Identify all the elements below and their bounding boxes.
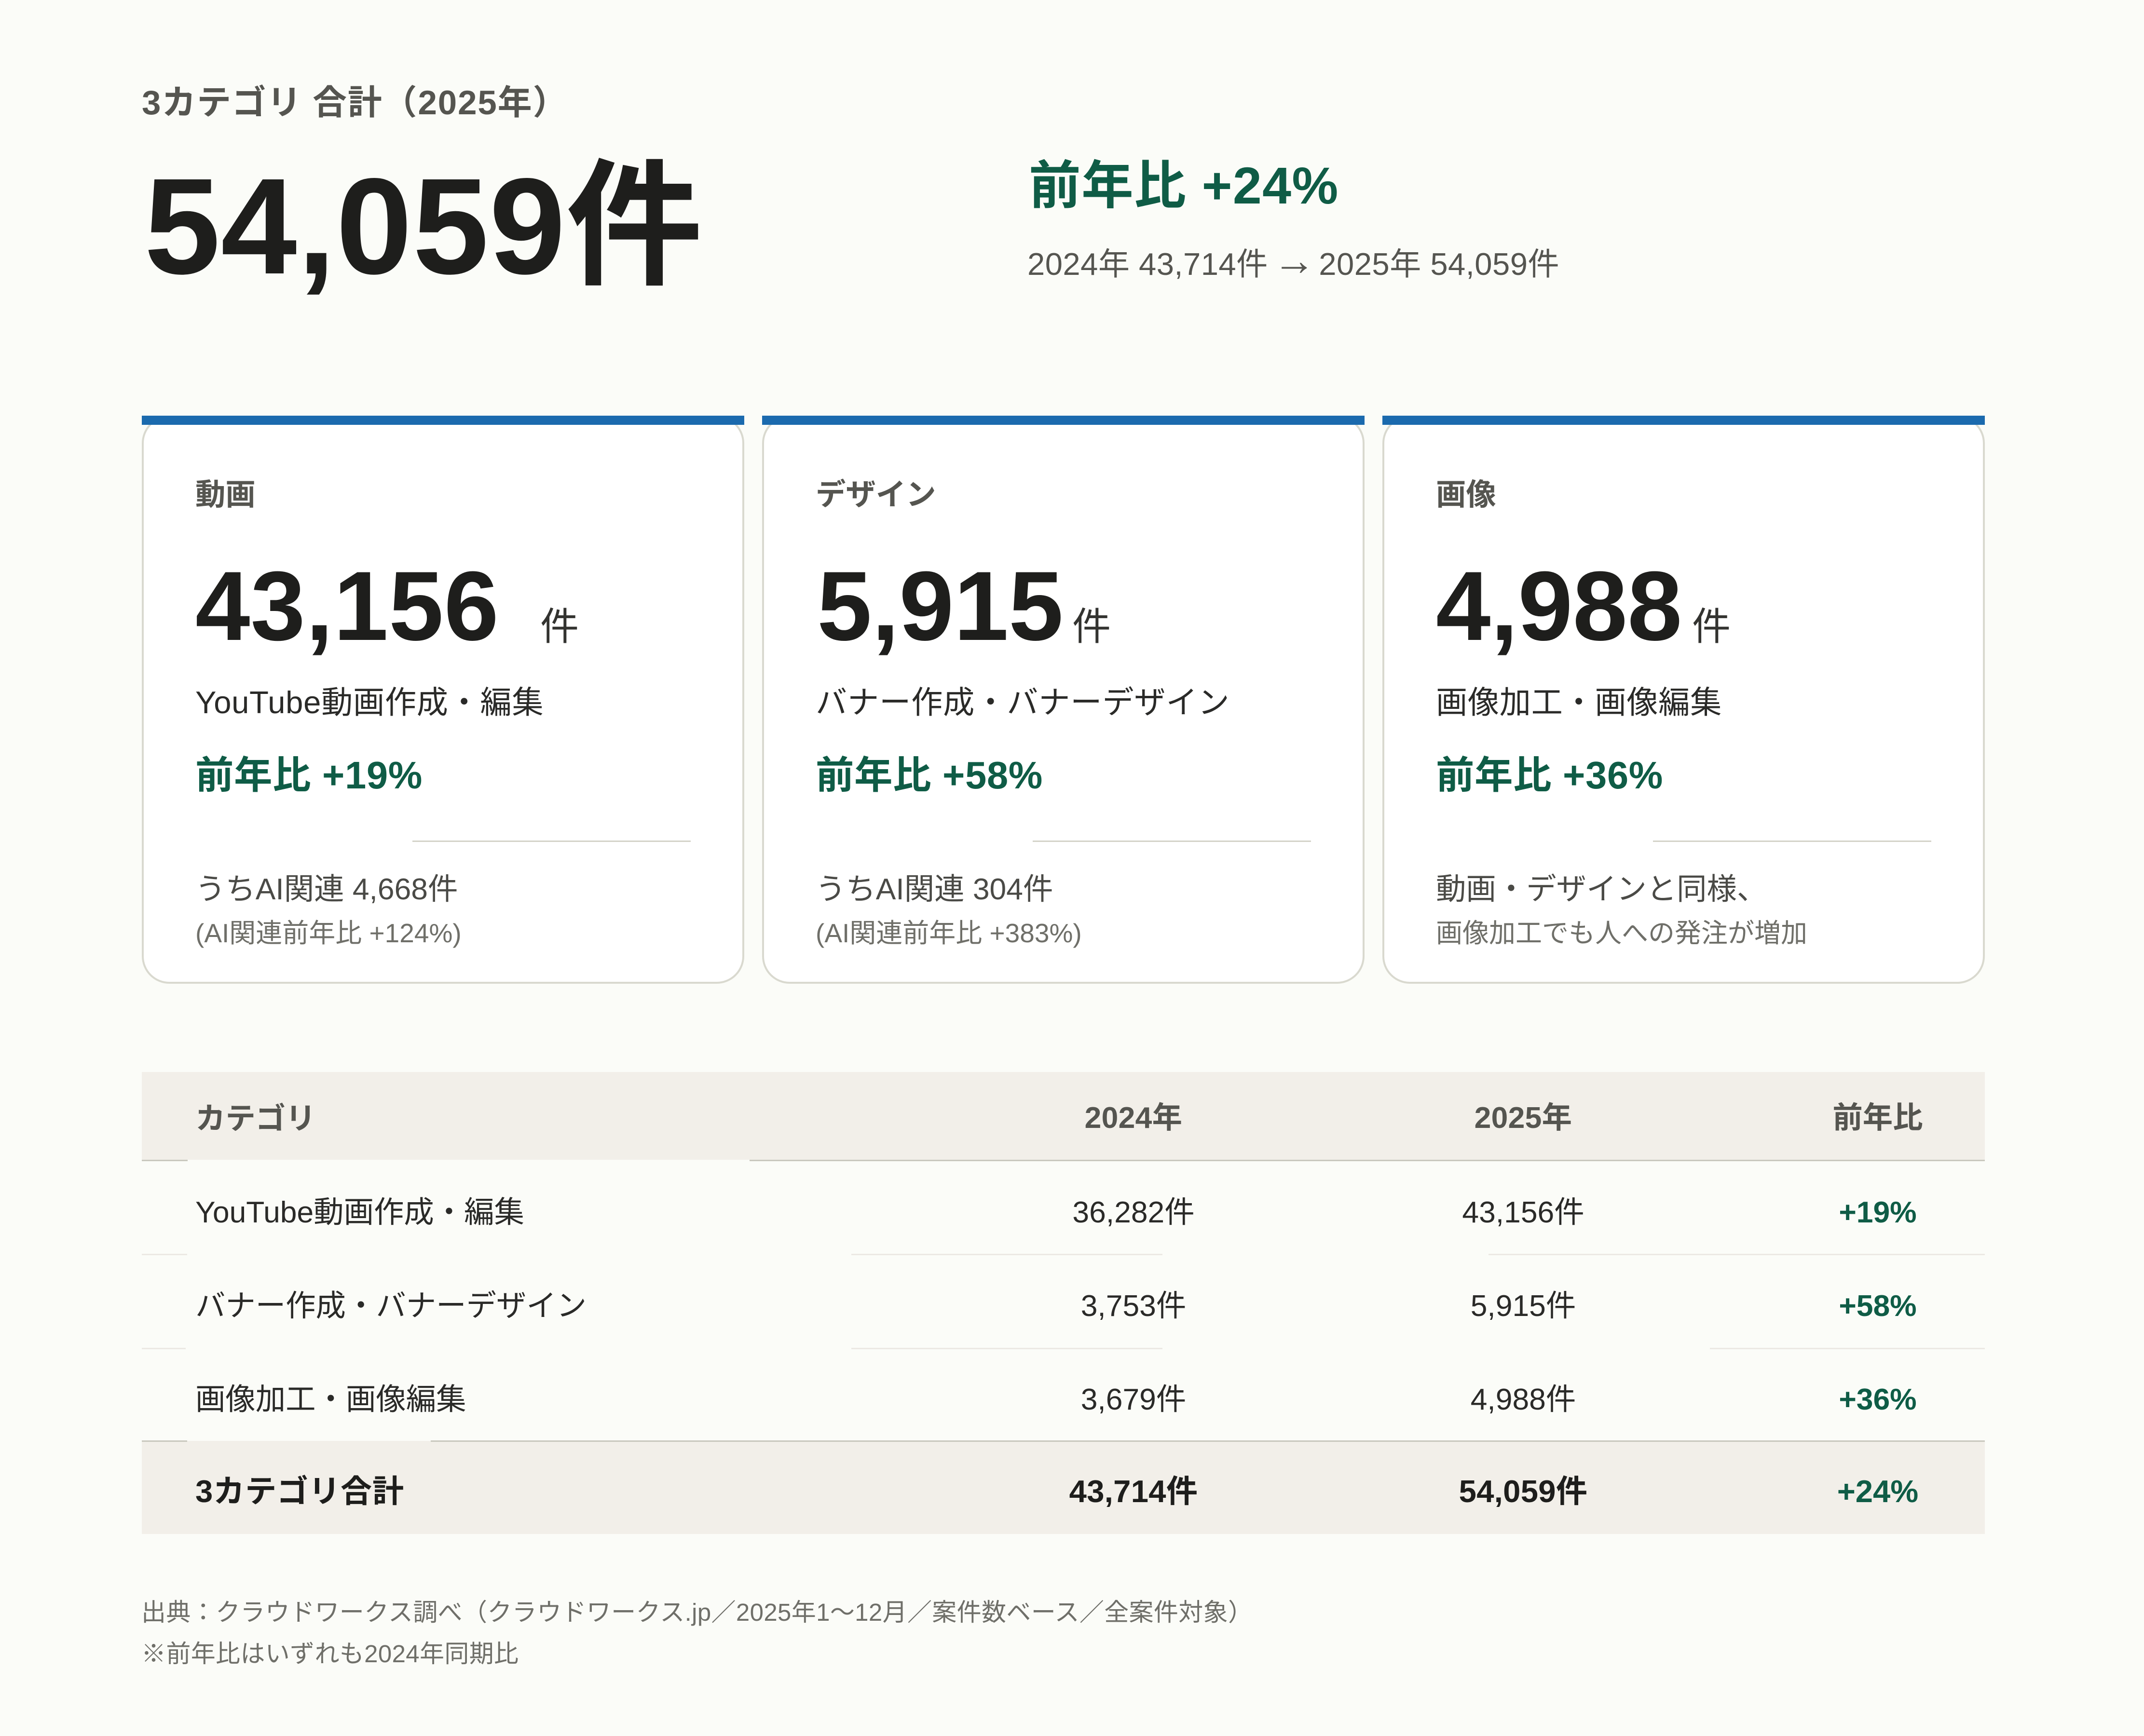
table header band xyxy=(142,1072,1985,1160)
row: video growth: +19% xyxy=(1839,1196,1917,1229)
headline: year over year xyxy=(1027,154,1572,285)
AI related count: うちAI関連 4,668件 xyxy=(195,873,458,906)
card frame xyxy=(762,416,1365,984)
text: 2024 to 2025 comparison: 2024年 43,714件 → 2025年 54,059件 xyxy=(1027,236,1559,284)
category label: 動画 xyxy=(195,478,256,512)
table header: 2024: 2024年 xyxy=(1085,1101,1182,1135)
row: video 2024: 36,282件 xyxy=(1072,1196,1195,1229)
table header: 2025: 2025年 xyxy=(1475,1101,1572,1135)
source line: 出典：クラウドワークス調べ（クラウドワークス.jp／2025年1〜12月／案件数ベース／全案件対象） xyxy=(141,1599,1253,1626)
year over year: 前年比 +19% xyxy=(195,754,423,797)
year over year: 前年比 +58% xyxy=(816,754,1043,797)
total row: 2024: 43,714件 xyxy=(1069,1474,1198,1509)
note line one: 動画・デザインと同様、 xyxy=(1436,873,1767,906)
total row: growth: +24% xyxy=(1837,1474,1918,1509)
category description: 画像加工・画像編集 xyxy=(1436,685,1722,720)
category label: デザイン xyxy=(816,478,936,512)
note line two: 画像加工でも人への発注が増加 xyxy=(1436,918,1807,948)
total row band xyxy=(142,1441,1985,1534)
panel: image card xyxy=(1382,416,1985,984)
table header: category: カテゴリ xyxy=(195,1102,316,1136)
row: image growth: +36% xyxy=(1839,1383,1917,1416)
total row: label: 3カテゴリ合計 xyxy=(195,1474,404,1509)
row: image 2025: 4,988件 xyxy=(1471,1383,1576,1416)
card count: 43,156 xyxy=(195,551,499,661)
row: banner growth: +58% xyxy=(1839,1289,1917,1323)
row: video name: YouTube動画作成・編集 xyxy=(195,1196,524,1229)
panel: design card xyxy=(762,416,1365,984)
category label: 画像 xyxy=(1436,478,1496,512)
year over year: 前年比 +36% xyxy=(1436,754,1663,797)
row: banner name: バナー作成・バナーデザイン xyxy=(195,1289,587,1323)
panel: video card xyxy=(142,416,744,984)
row: banner 2025: 5,915件 xyxy=(1471,1289,1576,1323)
count unit: 件 xyxy=(1692,605,1731,648)
footer: source note xyxy=(0,1591,1302,1673)
table header: year over year: 前年比 xyxy=(1832,1101,1923,1135)
count unit: 件 xyxy=(540,605,579,648)
card frame xyxy=(1382,416,1985,984)
count unit: 件 xyxy=(1072,605,1111,648)
card accent bar xyxy=(1382,416,1985,425)
row: video 2025: 43,156件 xyxy=(1462,1196,1584,1229)
row: image 2024: 3,679件 xyxy=(1081,1383,1186,1416)
card accent bar xyxy=(762,416,1365,425)
heading: category total label: 3カテゴリ 合計（2025年） xyxy=(142,84,568,122)
card frame xyxy=(142,416,744,984)
total row: 2025: 54,059件 xyxy=(1459,1474,1587,1509)
row: image name: 画像加工・画像編集 xyxy=(195,1383,466,1416)
AI related growth: (AI関連前年比 +383%) xyxy=(816,918,1082,948)
text: total year over year: 前年比 +24% xyxy=(1029,157,1339,215)
big number: total count: 54,059件 xyxy=(144,150,703,303)
comparison note: ※前年比はいずれも2024年同期比 xyxy=(141,1640,519,1668)
card count: 4,988 xyxy=(1436,551,1682,661)
card count: 5,915 xyxy=(817,551,1063,661)
category description: バナー作成・バナーデザイン xyxy=(816,685,1230,720)
card accent bar xyxy=(142,416,744,425)
category description: YouTube動画作成・編集 xyxy=(195,685,544,720)
row: banner 2024: 3,753件 xyxy=(1081,1289,1186,1323)
AI related growth: (AI関連前年比 +124%) xyxy=(195,918,462,948)
AI related count: うちAI関連 304件 xyxy=(816,873,1053,906)
headline: total xyxy=(142,82,721,299)
